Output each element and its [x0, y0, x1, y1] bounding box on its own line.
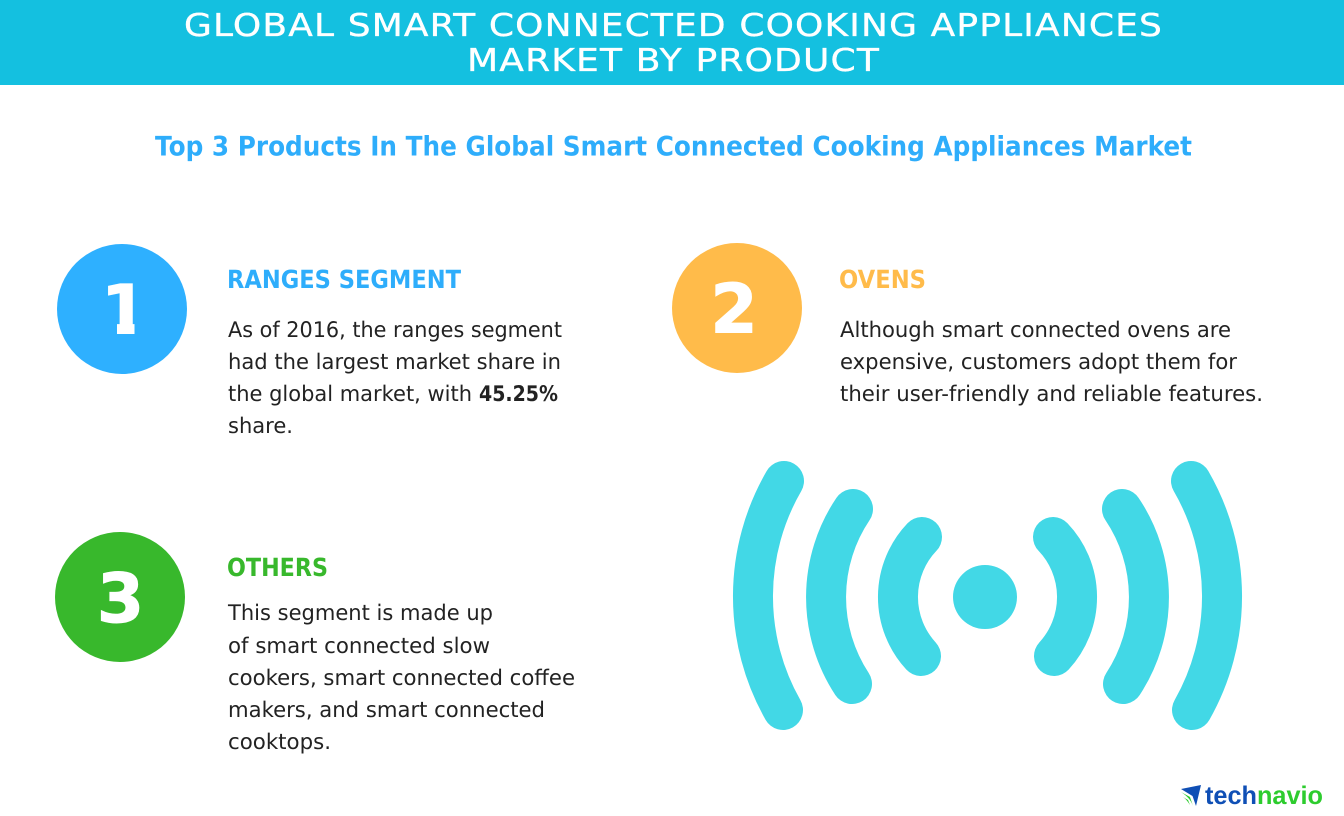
subtitle: Top 3 Products In The Global Smart Connected Cooking Appliances Market — [155, 132, 1192, 162]
text: others description: cooktops. — [228, 730, 331, 755]
header banner: MARKET BY PRODUCT — [467, 43, 880, 79]
icon: number 2 badge — [672, 243, 802, 373]
header banner: GLOBAL SMART CONNECTED COOKING APPLIANCES — [184, 8, 1163, 44]
text: ranges description: share. — [228, 414, 293, 439]
text: others description — [227, 601, 575, 755]
text: ranges description: had the largest market share in — [228, 350, 561, 375]
text: ovens description: expensive, customers adopt them for — [840, 350, 1237, 375]
panel: others — [55, 532, 575, 755]
icon: number 3 badge: 3 — [97, 560, 144, 639]
icon: number 1 badge — [57, 244, 187, 374]
text: ovens description: Although smart connected ovens are — [840, 318, 1231, 343]
logo: technavio: technavio — [1205, 782, 1323, 810]
heading: others: OTHERS — [227, 553, 328, 582]
icon: number 1 badge: 1 — [101, 272, 148, 350]
text: ranges description: As of 2016, the ranges segment — [228, 318, 562, 343]
heading: ranges segment: RANGES SEGMENT — [227, 265, 461, 294]
heading: ovens: OVENS — [839, 265, 926, 294]
text: others description: cookers, smart connected coffee — [228, 666, 575, 691]
icon: number 3 badge — [55, 532, 185, 662]
text: ranges description: the global market, with — [228, 382, 472, 407]
text: others description: This segment is made up — [227, 601, 493, 626]
icon: number 2 badge: 2 — [710, 270, 758, 350]
text: others description: of smart connected slow — [228, 634, 490, 659]
text: others description: makers, and smart connected — [228, 698, 545, 723]
text: ranges description: 45.25% — [479, 382, 558, 407]
text: ranges description — [228, 318, 562, 439]
icon: wireless signal — [753, 481, 1222, 710]
icon: logo arrow — [1181, 785, 1201, 806]
text: ovens description — [840, 318, 1263, 407]
panel: ranges segment — [57, 244, 562, 439]
text: ovens description: their user-friendly and reliable features. — [840, 382, 1263, 407]
panel: ovens — [672, 243, 1263, 407]
header banner — [0, 0, 1344, 85]
